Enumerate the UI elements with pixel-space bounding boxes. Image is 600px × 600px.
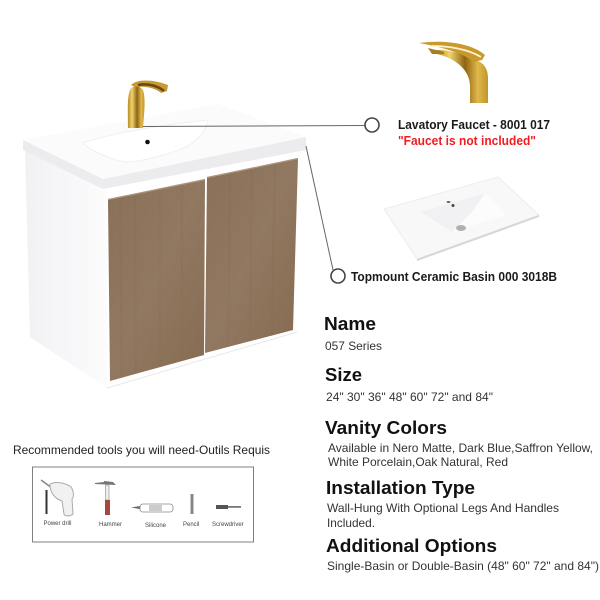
text: installation type value: Included. bbox=[327, 516, 375, 530]
text: additional options value: Single-Basin or Double-Basin (48" 60" 72" and 84") bbox=[327, 559, 599, 573]
icon: screwdriver bbox=[216, 505, 241, 509]
text: vanity colors value: Available in Nero Matte, Dark Blue,Saffron Yellow, bbox=[328, 441, 593, 455]
text: installation type value: Wall-Hung With Optional Legs And Handles bbox=[327, 501, 559, 515]
icon: ceramic basin product photo bbox=[384, 177, 539, 261]
left door bbox=[108, 180, 205, 381]
icon: silicone tube bbox=[131, 504, 173, 512]
callout marker: faucet bbox=[365, 118, 379, 132]
leader line to faucet callout bbox=[143, 126, 365, 127]
ceramic counter top bbox=[23, 104, 306, 189]
icon: power drill bbox=[41, 480, 73, 516]
drain bbox=[145, 140, 150, 144]
text: screwdriver: Screwdriver bbox=[212, 522, 244, 528]
heading: name: Name bbox=[324, 313, 376, 334]
text: pencil: Pencil bbox=[183, 522, 199, 528]
text: silicone: Silicone bbox=[145, 523, 167, 529]
heading: installation type: Installation Type bbox=[326, 477, 475, 498]
text: vanity colors value: White Porcelain,Oak Natural, Red bbox=[328, 455, 508, 469]
vanity cabinet illustration bbox=[23, 80, 306, 388]
heading: vanity colors: Vanity Colors bbox=[325, 417, 447, 438]
heading: recommended tools: Recommended tools you will need-Outils Requis bbox=[13, 443, 270, 457]
icon: gold faucet product photo bbox=[419, 42, 488, 103]
icon: pencil bbox=[190, 494, 194, 514]
text: name value: 057 Series bbox=[325, 339, 382, 353]
callout marker: basin bbox=[331, 269, 345, 283]
text: power drill: Power drill bbox=[44, 521, 72, 527]
leader line to basin callout bbox=[306, 146, 333, 270]
heading: size: Size bbox=[325, 364, 362, 385]
text: faucet label: Lavatory Faucet - 8001 017 bbox=[398, 118, 550, 132]
icon: hammer bbox=[95, 481, 116, 515]
heading: additional options: Additional Options bbox=[326, 535, 497, 556]
text: basin label: Topmount Ceramic Basin 000 3018B bbox=[351, 270, 557, 284]
panel: tools box bbox=[32, 467, 254, 542]
faucet on vanity bbox=[128, 80, 168, 128]
text: size value: 24" 30" 36" 48" 60" 72" and 84" bbox=[326, 390, 493, 404]
cabinet body bbox=[25, 146, 303, 388]
text: faucet not included note: "Faucet is not included" bbox=[398, 134, 536, 148]
sink bowl bbox=[83, 120, 208, 162]
right door bbox=[205, 158, 298, 353]
text: hammer: Hammer bbox=[99, 522, 122, 528]
